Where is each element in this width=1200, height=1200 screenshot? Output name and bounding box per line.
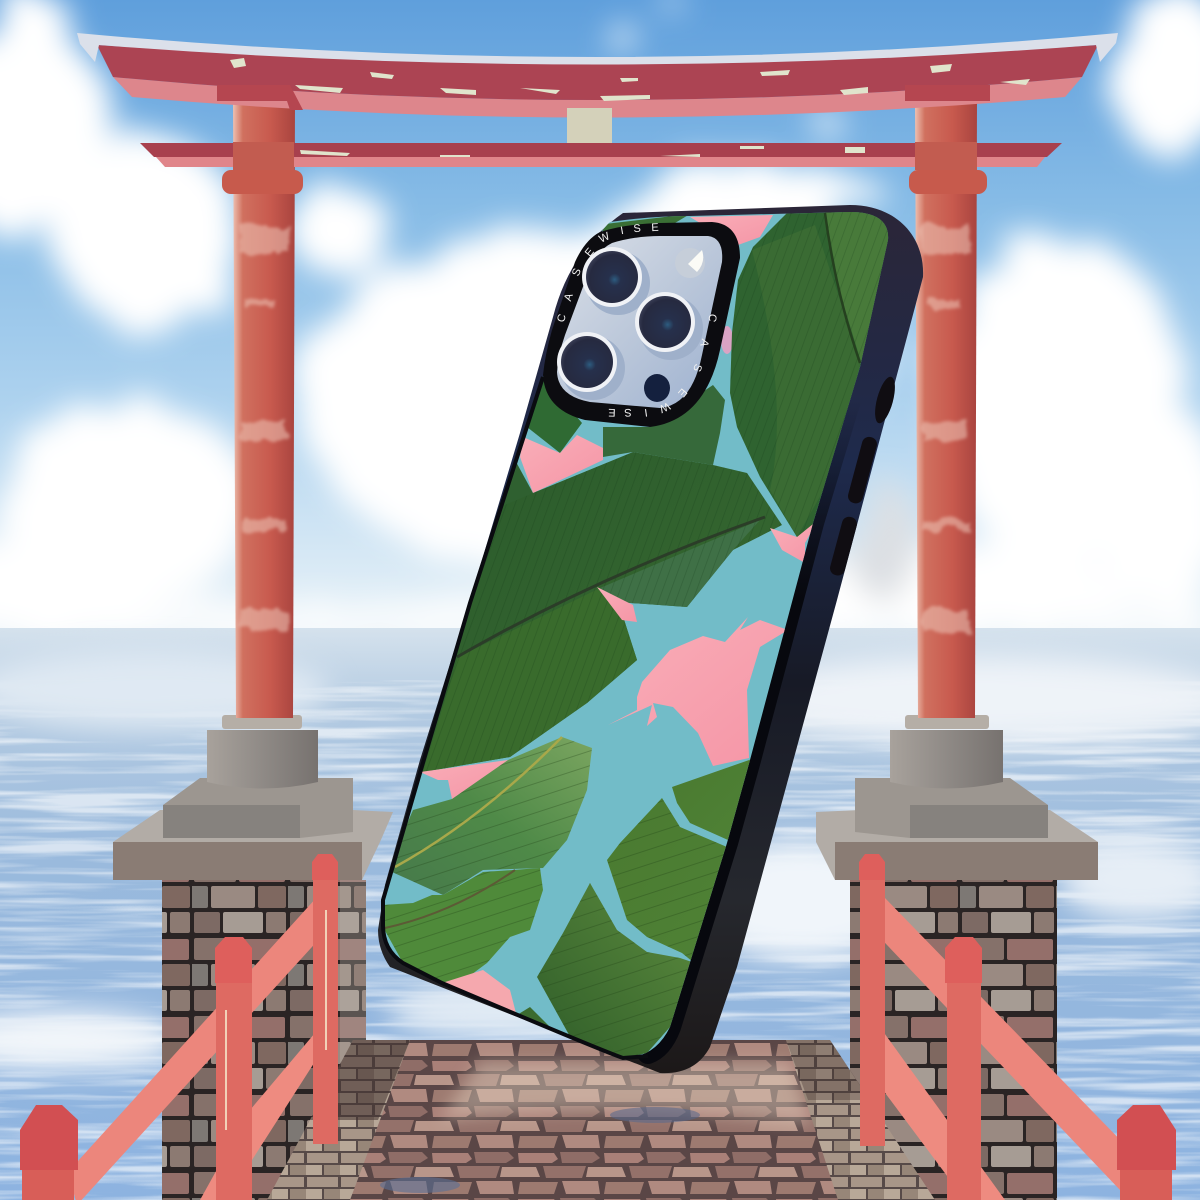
sky background	[0, 0, 1200, 630]
brand text upper: S	[570, 267, 584, 278]
flower: left	[520, 435, 603, 493]
camera ring	[543, 222, 740, 427]
leaf: behind camera	[603, 385, 725, 465]
brand text lower: I	[644, 406, 648, 418]
phone side buttons	[828, 375, 899, 577]
phone frame	[378, 205, 923, 1073]
left pillar base	[113, 715, 393, 1200]
flower: bottom	[445, 970, 516, 1012]
torii lower beam	[140, 142, 1062, 170]
leaf: centre right veins	[607, 798, 727, 962]
torii brackets	[217, 85, 990, 110]
lidar sensor	[644, 374, 670, 402]
leaf: top right veins	[730, 210, 900, 537]
leaf: lower left	[392, 737, 592, 895]
brand text lower: S	[624, 406, 632, 418]
brand text upper: E	[583, 246, 597, 259]
leaf: top strip	[602, 216, 686, 232]
sea	[0, 628, 1200, 1200]
brand text upper: W	[597, 230, 612, 246]
leaf: top right	[730, 210, 900, 537]
leaf: right small	[672, 759, 752, 840]
leaf: central	[400, 452, 782, 775]
leaf: central lit section	[600, 520, 760, 607]
flower: top	[690, 215, 773, 245]
brand text lower: C	[705, 312, 719, 323]
leaf: tiny bottom	[520, 1007, 549, 1026]
flash	[675, 248, 705, 278]
brand text lower: S	[690, 362, 704, 373]
black inner band	[648, 367, 860, 1053]
brand text lower: A	[697, 338, 711, 348]
right railing	[859, 854, 1176, 1200]
leaf: bottom centre	[537, 883, 695, 1058]
petal: lilac behind camera	[721, 326, 733, 354]
brand text upper: A	[562, 291, 576, 303]
brand text lower: E	[608, 406, 616, 418]
left pillar	[222, 100, 303, 718]
leaf: central midrib	[457, 517, 765, 657]
brand text upper: I	[620, 225, 625, 237]
leaf: central lower section	[423, 588, 637, 772]
brand text upper: E	[651, 222, 659, 234]
stone walkway	[267, 1040, 935, 1200]
leaf: small left	[527, 377, 582, 453]
leaf: lower left midrib	[395, 737, 562, 867]
leaf: bottom centre veins	[537, 883, 695, 1058]
leaf: bottom left midrib	[385, 870, 515, 928]
flower: small centre	[597, 587, 637, 622]
leaf: left edge	[504, 464, 533, 506]
phone	[370, 200, 923, 1080]
leaf: lower left veins	[392, 737, 592, 895]
flower: lower left	[420, 760, 508, 799]
lens shoulders	[561, 251, 703, 400]
leaf: top right midrib	[825, 213, 860, 363]
right pillar	[909, 100, 987, 718]
flower: right	[770, 524, 813, 562]
leaf: bottom left veins	[383, 868, 543, 983]
lens 3	[557, 332, 617, 392]
flower: large pink trumpet	[608, 617, 788, 766]
lens 2	[635, 292, 695, 352]
left railing	[20, 854, 338, 1200]
brand text upper: C	[555, 313, 569, 324]
brand text upper	[555, 222, 659, 324]
brand text lower: W	[657, 399, 672, 415]
phone left and bottom rim	[383, 377, 648, 1058]
leaf: bottom left	[383, 868, 543, 983]
brand text lower	[608, 312, 719, 418]
leaf: central veins	[400, 452, 782, 775]
clouds	[0, 0, 1200, 640]
leaf: centre right	[607, 798, 727, 962]
right pillar base	[816, 715, 1098, 1200]
brand text lower: E	[675, 386, 689, 399]
case back artwork	[370, 200, 900, 1080]
leaf: top right light half	[826, 212, 888, 362]
torii top beam	[77, 33, 1118, 118]
brand text upper: S	[633, 223, 641, 235]
leaf: top right lit band	[752, 225, 860, 537]
camera plate	[557, 236, 722, 408]
lens 1	[582, 247, 642, 307]
torii centre post	[567, 108, 612, 144]
